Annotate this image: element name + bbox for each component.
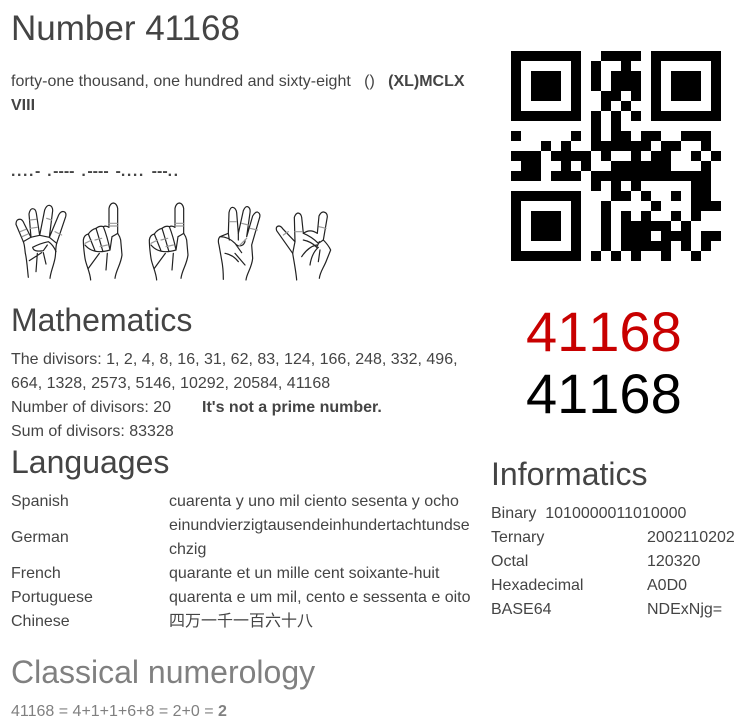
row: german bbox=[11, 517, 470, 558]
text: numerology sum: 41168 = 4+1+1+6+8 = 2+0 = 2 bbox=[11, 703, 227, 720]
row: portuguese bbox=[11, 589, 471, 606]
row: ternary: Ternary bbox=[491, 529, 544, 546]
row: hexadecimal: A0D0 bbox=[647, 577, 687, 594]
row: octal: Octal bbox=[491, 553, 528, 570]
icon: hand one bbox=[83, 203, 122, 280]
big number: black: 41168 bbox=[526, 362, 682, 425]
row: french: quarante et un mille cent soixante-huit bbox=[169, 565, 439, 582]
row: portuguese: Portuguese bbox=[11, 589, 93, 606]
row: french: French bbox=[11, 565, 61, 582]
text: divisors: The divisors: 1, 2, 4, 8, 16, 31, 62, 83, 124, 166, 248, 332, 496, bbox=[11, 351, 458, 368]
icon: hand three bbox=[218, 207, 260, 280]
text: divisors: Number of divisors: 20 bbox=[11, 399, 171, 416]
row: german: German bbox=[11, 529, 69, 546]
row: spanish: cuarenta y uno mil ciento sesenta y ocho bbox=[169, 493, 459, 510]
row: binary: Binary 1010000011010000 bbox=[491, 505, 686, 522]
row: portuguese: quarenta e um mil, cento e sessenta e oito bbox=[169, 589, 471, 606]
heading: informatics: Informatics bbox=[491, 456, 647, 492]
heading: languages: Languages bbox=[11, 444, 169, 480]
text: divisors: It's not a prime number. bbox=[202, 399, 382, 416]
text: divisors: 664, 1328, 2573, 5146, 10292, 20584, 41168 bbox=[11, 375, 330, 392]
row: chinese bbox=[11, 612, 313, 630]
row: spanish bbox=[11, 493, 459, 510]
text: number in words and roman numeral: forty-one thousand, one hundred and sixty-eight () (XL)MCLX bbox=[11, 73, 465, 90]
text: morse code: ....- .---- .---- -.... ---.. bbox=[11, 163, 180, 180]
text: number in words and roman numeral: VIII bbox=[11, 97, 35, 114]
icon: QR code bbox=[511, 51, 721, 261]
row: base64: NDExNjg= bbox=[647, 601, 722, 618]
heading: mathematics: Mathematics bbox=[11, 302, 192, 338]
row: hexadecimal: Hexadecimal bbox=[491, 577, 583, 594]
row: chinese: Chinese bbox=[11, 613, 70, 630]
title: Number 41168 bbox=[11, 9, 240, 48]
row: hexadecimal bbox=[491, 577, 687, 594]
icon: hand four bbox=[16, 205, 66, 278]
table: languages bbox=[11, 493, 471, 630]
big number: red: 41168 bbox=[526, 300, 682, 363]
icon: sign language hands bbox=[15, 202, 332, 281]
icon: hand pinky and index bbox=[276, 212, 331, 280]
heading: classical numerology: Classical numerology bbox=[11, 654, 315, 690]
row: german: einundvierzigtausendeinhundertachtundse bbox=[169, 517, 470, 534]
row: ternary bbox=[491, 529, 735, 546]
row: base64: BASE64 bbox=[491, 601, 551, 618]
row: spanish: Spanish bbox=[11, 493, 69, 510]
icon: hand one repeated bbox=[149, 203, 188, 280]
text: divisors bbox=[11, 351, 458, 440]
row: chinese: 四万一千一百六十八 bbox=[169, 613, 313, 630]
row: octal bbox=[491, 553, 700, 570]
row: base64 bbox=[491, 601, 722, 618]
row: french bbox=[11, 565, 440, 582]
text: number in words and roman numeral bbox=[11, 73, 465, 114]
text: divisors: Sum of divisors: 83328 bbox=[11, 423, 174, 440]
row: german: chzig bbox=[169, 541, 206, 558]
row: octal: 120320 bbox=[647, 553, 700, 570]
table: informatics bbox=[491, 505, 735, 618]
row: ternary: 2002110202 bbox=[647, 529, 735, 546]
